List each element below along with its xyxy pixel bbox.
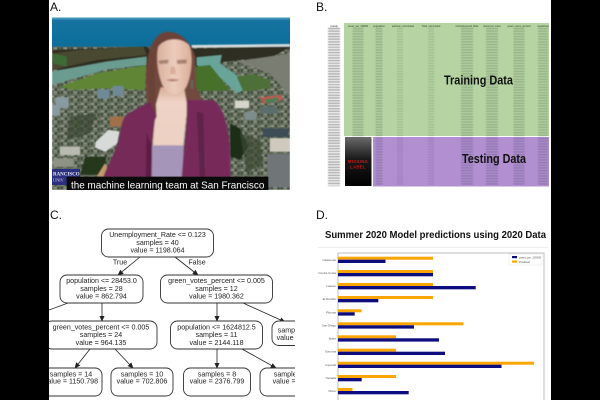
node: population 28453: population <= 28453.0 [66, 277, 137, 285]
leaf: 14 samples: value = 1150.798 [44, 378, 98, 386]
node: green votes left [45, 321, 157, 349]
leaf: 10 samples: value = 702.806 [117, 378, 167, 386]
county axis labels: Nevada [326, 376, 336, 380]
panel B: data table [330, 23, 549, 186]
label D: D. [316, 208, 328, 222]
leaf: 8 samples: value = 2376.799 [190, 378, 244, 386]
node: green votes left: samples = 24 [80, 331, 122, 339]
node: green votes left: green_votes_percent <= 0.005 [53, 324, 149, 332]
county axis labels: Butte [329, 336, 336, 340]
node: green votes right: value = 1980.362 [189, 292, 244, 300]
missing label block: MISSING [348, 159, 368, 164]
hair strands over face side [154, 32, 188, 116]
county axis labels [318, 258, 336, 393]
testing data label: Testing Data [462, 152, 527, 166]
university logo: UNIV [53, 177, 65, 182]
table headers: Total_vaccinated [422, 25, 441, 28]
training data region [344, 23, 549, 136]
root node: value = 1198.064 [130, 246, 185, 254]
rule under title [318, 246, 548, 248]
white cover at right edge of tree [295, 220, 310, 400]
hair [145, 34, 202, 104]
right black margin [551, 0, 600, 400]
table rows: testing [379, 138, 543, 186]
ocean [52, 17, 290, 49]
node: clipped right: samples = 1 [278, 326, 316, 334]
predicted bars [338, 257, 534, 391]
legend [509, 254, 542, 265]
caption bar: the machine learning team at San Francisco [71, 180, 264, 191]
leaf: 10 samples [111, 368, 173, 396]
county axis labels: Calaveras [322, 258, 336, 262]
table headers: green_votes_percent [507, 25, 531, 28]
county axis labels: Plumas [326, 310, 336, 314]
node: population 1624812.5: population <= 1624812.5 [177, 324, 256, 332]
node: population 28453: value = 862.794 [76, 292, 127, 300]
county axis labels: San Diego [322, 324, 336, 328]
university logo [52, 169, 80, 185]
tree edges [49, 257, 285, 368]
table headers [330, 25, 549, 28]
root node: samples = 40 [136, 239, 179, 247]
table headers: partisan_vaccinated [392, 25, 415, 28]
leaf: 14 samples: samples = 14 [50, 370, 92, 378]
node: population 1624812.5: samples = 11 [196, 331, 237, 339]
root node [102, 229, 214, 257]
cardigan [103, 102, 157, 177]
panel C: decision tree [49, 228, 295, 396]
testing data region [373, 137, 549, 186]
panel D: bar chart [318, 248, 548, 400]
cases per 100000 bars [338, 260, 502, 394]
missing label block [345, 137, 372, 186]
leaf: 10 samples: samples = 10 [121, 370, 163, 378]
node: clipped right: value = 2000 [277, 334, 317, 342]
woman [103, 32, 231, 177]
leaf: 8 samples [184, 368, 250, 396]
table rows: training [358, 28, 543, 136]
node: green votes right: green_votes_percent <= 0.005 [168, 277, 265, 285]
table headers: population [373, 25, 385, 28]
node: green votes left: value = 964.135 [76, 339, 126, 347]
county name column [328, 28, 340, 186]
chart frame [338, 253, 544, 400]
county axis labels: Mono [328, 389, 336, 393]
label C: C. [50, 208, 62, 222]
node: population 1624812.5: value = 2144.118 [189, 339, 244, 347]
table headers: democrat_votes [483, 25, 502, 28]
table headers: Unemployment_Rate [456, 25, 479, 28]
node: population 28453 [60, 275, 143, 303]
leaf: clipped right: value = 1516 [273, 378, 313, 386]
legend: Predicted [519, 260, 531, 264]
node: green votes right [160, 275, 272, 303]
root node: Unemployment_Rate <= 0.123 [109, 231, 206, 239]
table headers: county [330, 25, 338, 28]
county axis labels: Contra Costa [318, 271, 336, 275]
county axis labels: Lassen [326, 284, 336, 288]
table headers: cases_per_100000 [348, 26, 369, 28]
leaf: clipped right [260, 368, 295, 396]
label A: A. [50, 0, 61, 14]
edge labels: True [113, 258, 127, 266]
label B: B. [316, 0, 327, 14]
face [157, 39, 192, 94]
training data label: Training Data [444, 74, 514, 88]
leaf: 8 samples: samples = 8 [198, 370, 236, 378]
floral top [151, 145, 183, 177]
county axis labels: Sonoma [325, 350, 336, 354]
earring [190, 80, 193, 89]
node: green votes right: samples = 12 [195, 285, 238, 293]
table headers: republican [537, 26, 549, 28]
county axis labels: El Dorado [323, 297, 336, 301]
county axis labels: Imperial [325, 363, 336, 367]
university logo: RANCISCO [53, 173, 80, 178]
legend: cases_per_100000 [519, 255, 542, 259]
aerial land and city [52, 44, 290, 190]
node: clipped right [272, 320, 295, 346]
leaf: 14 samples [49, 368, 102, 396]
node: population 28453: samples = 28 [80, 285, 123, 293]
neck and chest [153, 87, 187, 147]
missing label block: LABEL [350, 164, 366, 170]
panel C: decision tree: False [188, 258, 206, 266]
panel A: video frame of speaker [52, 17, 290, 191]
left black margin [0, 0, 49, 400]
node: population 1624812.5 [170, 321, 262, 349]
panel D: chart title: Summer 2020 Model predictions using 2020 Data [325, 229, 546, 241]
leaf: clipped right: samples = 3 [274, 370, 312, 378]
